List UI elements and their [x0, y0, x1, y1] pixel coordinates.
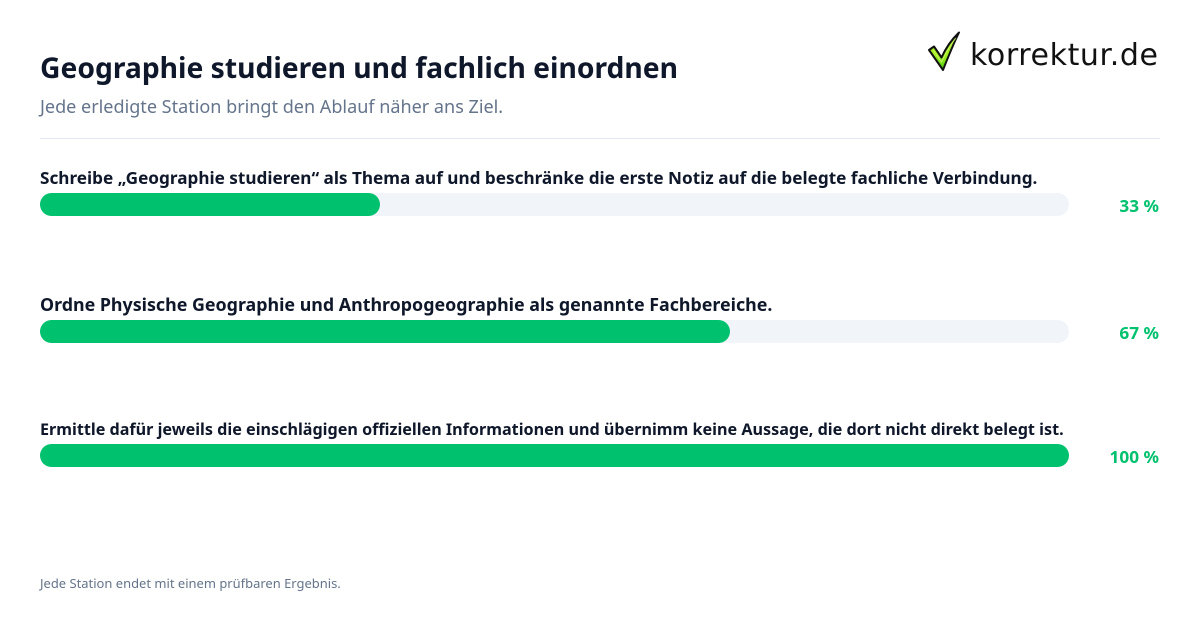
- step 3 progress bar: [40, 444, 1069, 467]
- title: Geographie studieren und fachlich einordnen: [40, 49, 678, 87]
- step 2: [40, 293, 1159, 345]
- step 1 percentage: 33 %: [1119, 195, 1159, 218]
- subtitle: Jede erledigte Station bringt den Ablauf näher ans Ziel.: [40, 95, 503, 119]
- icon: green check mark: [928, 32, 960, 71]
- step 1 progress bar: [40, 193, 1069, 216]
- step 3 label: Ermittle dafür jeweils die einschlägigen offiziellen Informationen und übernimm keine Aussage, die dort nicht direkt belegt ist.: [40, 418, 1064, 440]
- step 3 percentage: 100 %: [1110, 446, 1159, 469]
- logo: korrektur.de: [928, 32, 1159, 73]
- step 3: [40, 418, 1159, 469]
- logo wordmark: korrektur.de: [970, 38, 1159, 73]
- step 2 label: Ordne Physische Geographie und Anthropogeographie als genannte Fachbereiche.: [40, 293, 772, 317]
- step 2 progress bar: [40, 320, 1069, 343]
- step 1: [40, 167, 1159, 218]
- divider: [40, 138, 1160, 139]
- step 1 label: Schreibe „Geographie studieren“ als Thema auf und beschränke die erste Notiz auf die belegte fachliche Verbindung.: [40, 167, 1037, 190]
- footer note: Jede Station endet mit einem prüfbaren Ergebnis.: [40, 574, 341, 592]
- step 2 percentage: 67 %: [1119, 322, 1159, 345]
